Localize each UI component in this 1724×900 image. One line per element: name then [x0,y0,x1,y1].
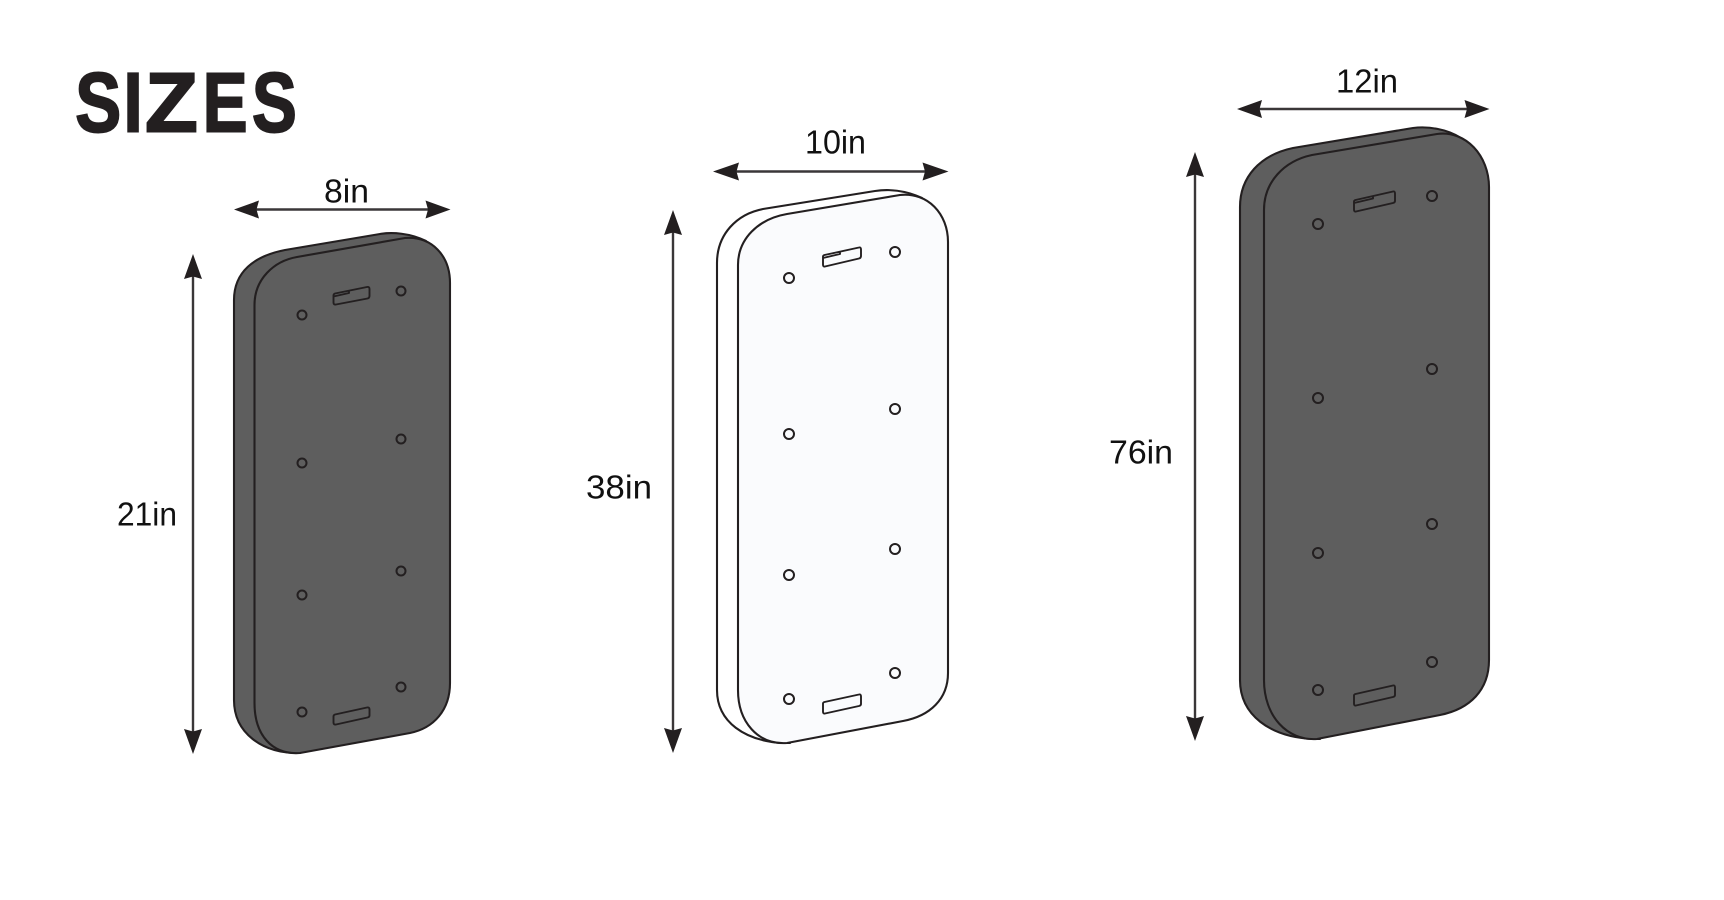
bottom slot [334,707,370,725]
width arrow 8in [234,200,450,218]
height label 38in: 38in [586,468,652,506]
top slot [1354,191,1395,212]
width label 8in: 8in [324,172,369,210]
mounting holes [784,247,900,704]
panel: 10in by 38in board [586,124,948,753]
title: Z [145,57,198,150]
bottom slot [823,694,861,714]
panel: 8in by 21in board [117,172,450,754]
width arrow 10in [713,162,948,180]
width arrow 12in [1237,100,1490,118]
board body, dark [234,233,450,753]
title: S [252,56,297,150]
title: E [203,56,248,150]
bottom slot [1354,685,1395,706]
width label 10in: 10in [805,124,866,160]
title [75,56,297,150]
board body, white [717,190,948,743]
height arrow 38in [664,210,682,753]
height label 21in: 21in [117,496,177,532]
mounting holes [298,286,406,716]
title: I [124,56,143,150]
title: S [75,56,121,150]
height label 76in: 76in [1109,434,1173,470]
panel: 12in by 76in board [1109,62,1490,741]
board body, dark [1240,127,1489,739]
top slot [823,247,861,267]
top slot [334,287,370,305]
height arrow 21in [184,254,202,754]
height arrow 76in [1186,152,1204,741]
mounting holes [1313,191,1437,695]
width label 12in: 12in [1336,62,1398,100]
